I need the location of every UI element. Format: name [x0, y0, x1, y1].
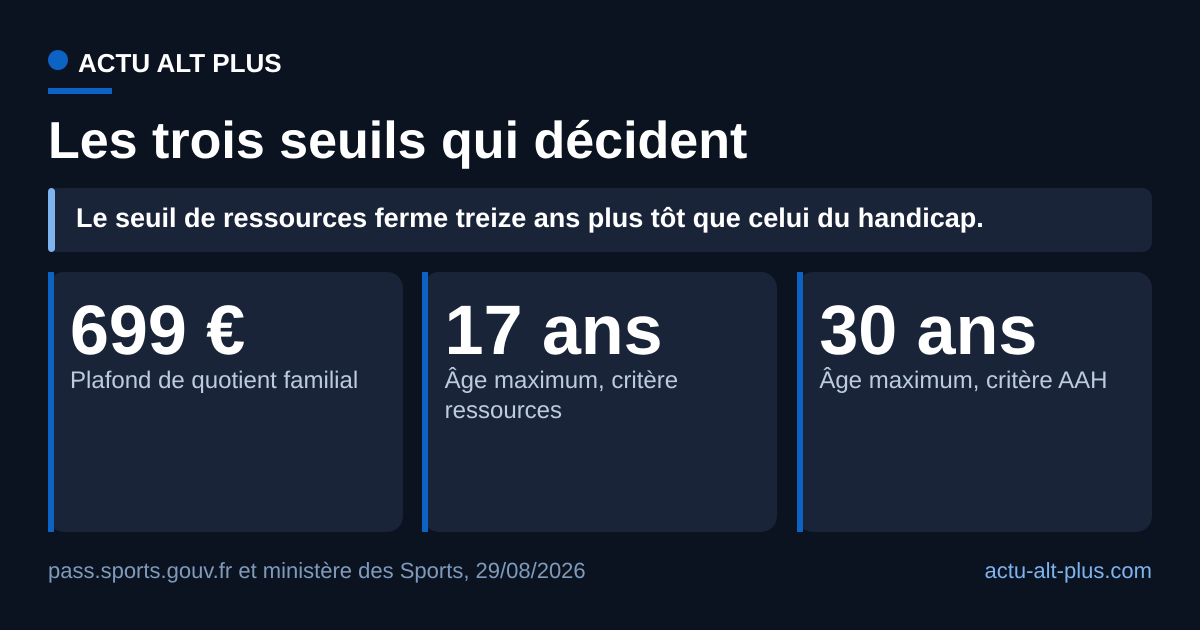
card accent bar [797, 272, 803, 532]
callout accent bar [48, 188, 54, 252]
stat value: 699 € [70, 291, 245, 369]
title: Les trois seuils qui décident [48, 112, 747, 170]
stat label: Plafond de quotient familial [70, 367, 358, 394]
stat value: 17 ans [445, 291, 663, 369]
card: critère ressources [423, 272, 777, 532]
brand name: ACTU ALT PLUS [78, 48, 282, 78]
source: pass.sports.gouv.fr et ministère des Sports, 29/08/2026 [48, 558, 586, 582]
stat label: Âge maximum, critère AAH [819, 367, 1107, 394]
card: quotient familial [48, 272, 403, 532]
stat label: Âge maximum, critère ressources [445, 367, 678, 424]
brand underline [48, 88, 112, 94]
callout [48, 188, 1152, 252]
card accent bar [48, 272, 54, 532]
site url: actu-alt-plus.com [984, 558, 1152, 582]
brand dot [48, 50, 68, 70]
card: critère AAH [797, 272, 1152, 532]
stat value: 30 ans [819, 291, 1037, 369]
callout text: Le seuil de ressources ferme treize ans plus tôt que celui du handicap. [76, 203, 984, 233]
card accent bar [422, 272, 428, 532]
